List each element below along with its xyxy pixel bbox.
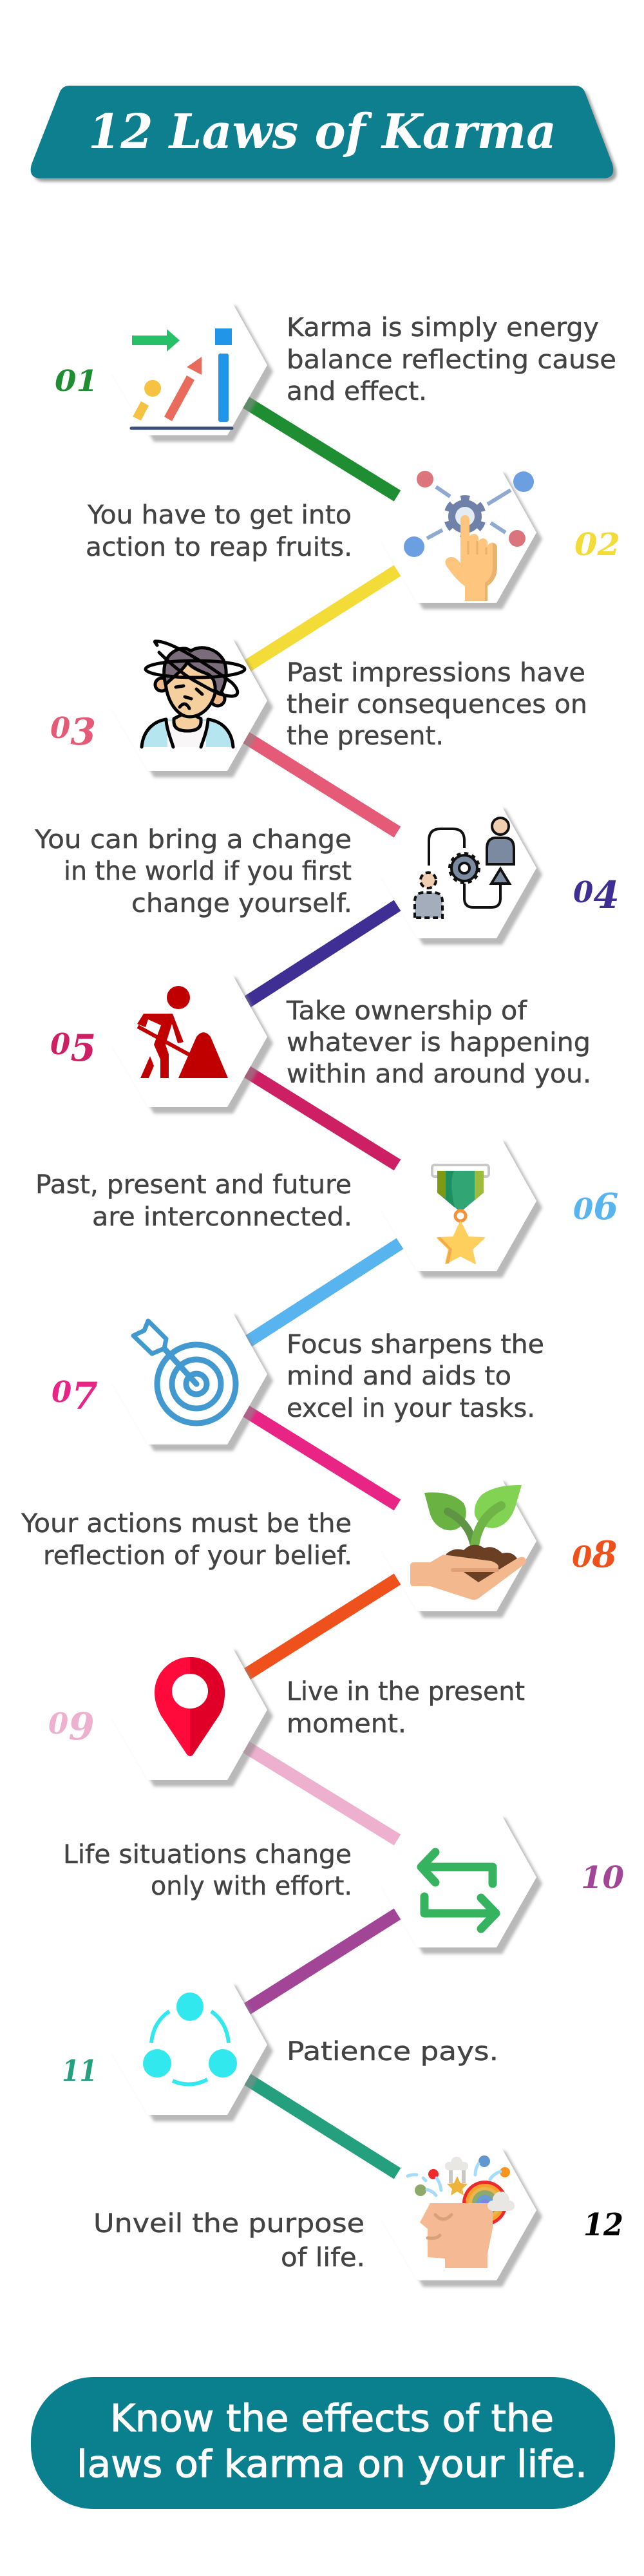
hexagon 02 [377, 467, 536, 603]
text: law 7: excel in your tasks. [287, 1394, 535, 1423]
icon: swap arrows [421, 1852, 496, 1929]
text: law 5: Take ownership of [286, 996, 527, 1026]
text: law 5 [286, 996, 591, 1089]
footer banner: laws of karma on your life. [77, 2442, 587, 2486]
text: law 1: Karma is simply energy [287, 313, 599, 343]
number 05: 5 [70, 1027, 96, 1070]
text: law 5: whatever is happening [287, 1028, 591, 1057]
hexagon 03 [108, 635, 267, 771]
text: law 9: Live in the present [287, 1677, 525, 1707]
text: law 1: and effect. [287, 377, 427, 406]
icon: plant in hand [410, 1485, 526, 1600]
text: law 4: change yourself. [131, 889, 352, 918]
text: law 6: are interconnected. [92, 1202, 352, 1232]
icon: dizzy person [142, 641, 245, 747]
number 10: 10 [581, 1860, 624, 1896]
text: law 6: Past, present and future [35, 1170, 352, 1200]
number 08: 08 [572, 1533, 617, 1576]
text: law 2: action to reap fruits. [86, 533, 352, 562]
text: law 2: You have to get into [87, 500, 352, 530]
text: law 3: their consequences on [287, 690, 587, 719]
footer banner: Know the effects of the [110, 2396, 554, 2440]
number 04: 4 [593, 873, 620, 917]
hexagon 12 [377, 2145, 536, 2280]
text: law 7 [287, 1330, 544, 1423]
hexagon 06 [377, 1135, 536, 1271]
hexagon 10 [377, 1812, 536, 1947]
number 09: 0 [48, 1707, 68, 1741]
number 12: 12 [583, 2207, 623, 2243]
number 03: 0 [50, 711, 70, 745]
text: law 1: balance reflecting cause [287, 345, 616, 375]
hexagon 05 [108, 971, 267, 1107]
number 02: 02 [574, 527, 620, 563]
text: law 3: Past impressions have [287, 658, 585, 688]
text: law 12: of life. [281, 2243, 365, 2273]
hexagon 07 [108, 1309, 267, 1444]
icon: hand pressing gear [404, 471, 534, 601]
hexagon 01 [108, 299, 267, 435]
text: law 3 [287, 658, 587, 751]
text: law 4 [34, 825, 352, 918]
text: law 2 [86, 500, 352, 562]
text: law 11: Patience pays. [287, 2037, 498, 2067]
text: law 8 [21, 1509, 352, 1571]
text: law 3: the present. [287, 721, 444, 751]
connector lines [219, 386, 400, 2174]
hexagon 09 [108, 1644, 267, 1780]
text: law 8: Your actions must be the [21, 1509, 352, 1539]
number 07: 0 [52, 1375, 71, 1409]
icon: three connected circles [143, 1993, 237, 2085]
text: law 9: moment. [287, 1709, 406, 1739]
text: law 7: Focus sharpens the [287, 1330, 544, 1359]
text: law 10 [63, 1840, 352, 1901]
icon: growth chart [131, 328, 232, 428]
icon: digging worker [137, 986, 228, 1078]
number 03: 3 [70, 710, 96, 753]
text: law 12 [93, 2209, 365, 2273]
title banner: 12 Laws of Karma [88, 104, 556, 160]
hexagon 04 [377, 802, 536, 938]
text: law 4: You can bring a change [34, 825, 352, 855]
text: law 9 [287, 1677, 525, 1739]
icon: medal [432, 1165, 489, 1264]
text: law 7: mind and aids to [287, 1361, 511, 1391]
hexagon 08 [377, 1475, 536, 1611]
number 01: 01 [55, 364, 98, 398]
icon: target with arrow [133, 1321, 236, 1423]
text: law 5: within and around you. [287, 1059, 591, 1089]
number 09: 9 [68, 1705, 95, 1748]
text: law 1 [287, 313, 616, 406]
text: law 12: Unveil the purpose [93, 2209, 365, 2239]
hexagon 11 [108, 1979, 267, 2115]
footer banner [31, 2377, 615, 2509]
number 05: 0 [50, 1027, 70, 1061]
icon: self change cycle [415, 818, 514, 918]
title banner [31, 86, 613, 178]
text: law 8: reflection of your belief. [43, 1541, 352, 1571]
icon: location pin [155, 1657, 225, 1756]
number 06: 06 [573, 1186, 618, 1228]
number 04: 0 [573, 875, 593, 909]
text: law 10: Life situations change [63, 1840, 352, 1870]
text: law 4: in the world if you first [64, 857, 352, 886]
icon: head with rainbow [408, 2155, 515, 2268]
text: law 10: only with effort. [151, 1871, 352, 1901]
number 11: 11 [62, 2054, 97, 2088]
text: law 6 [35, 1170, 352, 1232]
number 07: 7 [71, 1374, 98, 1418]
